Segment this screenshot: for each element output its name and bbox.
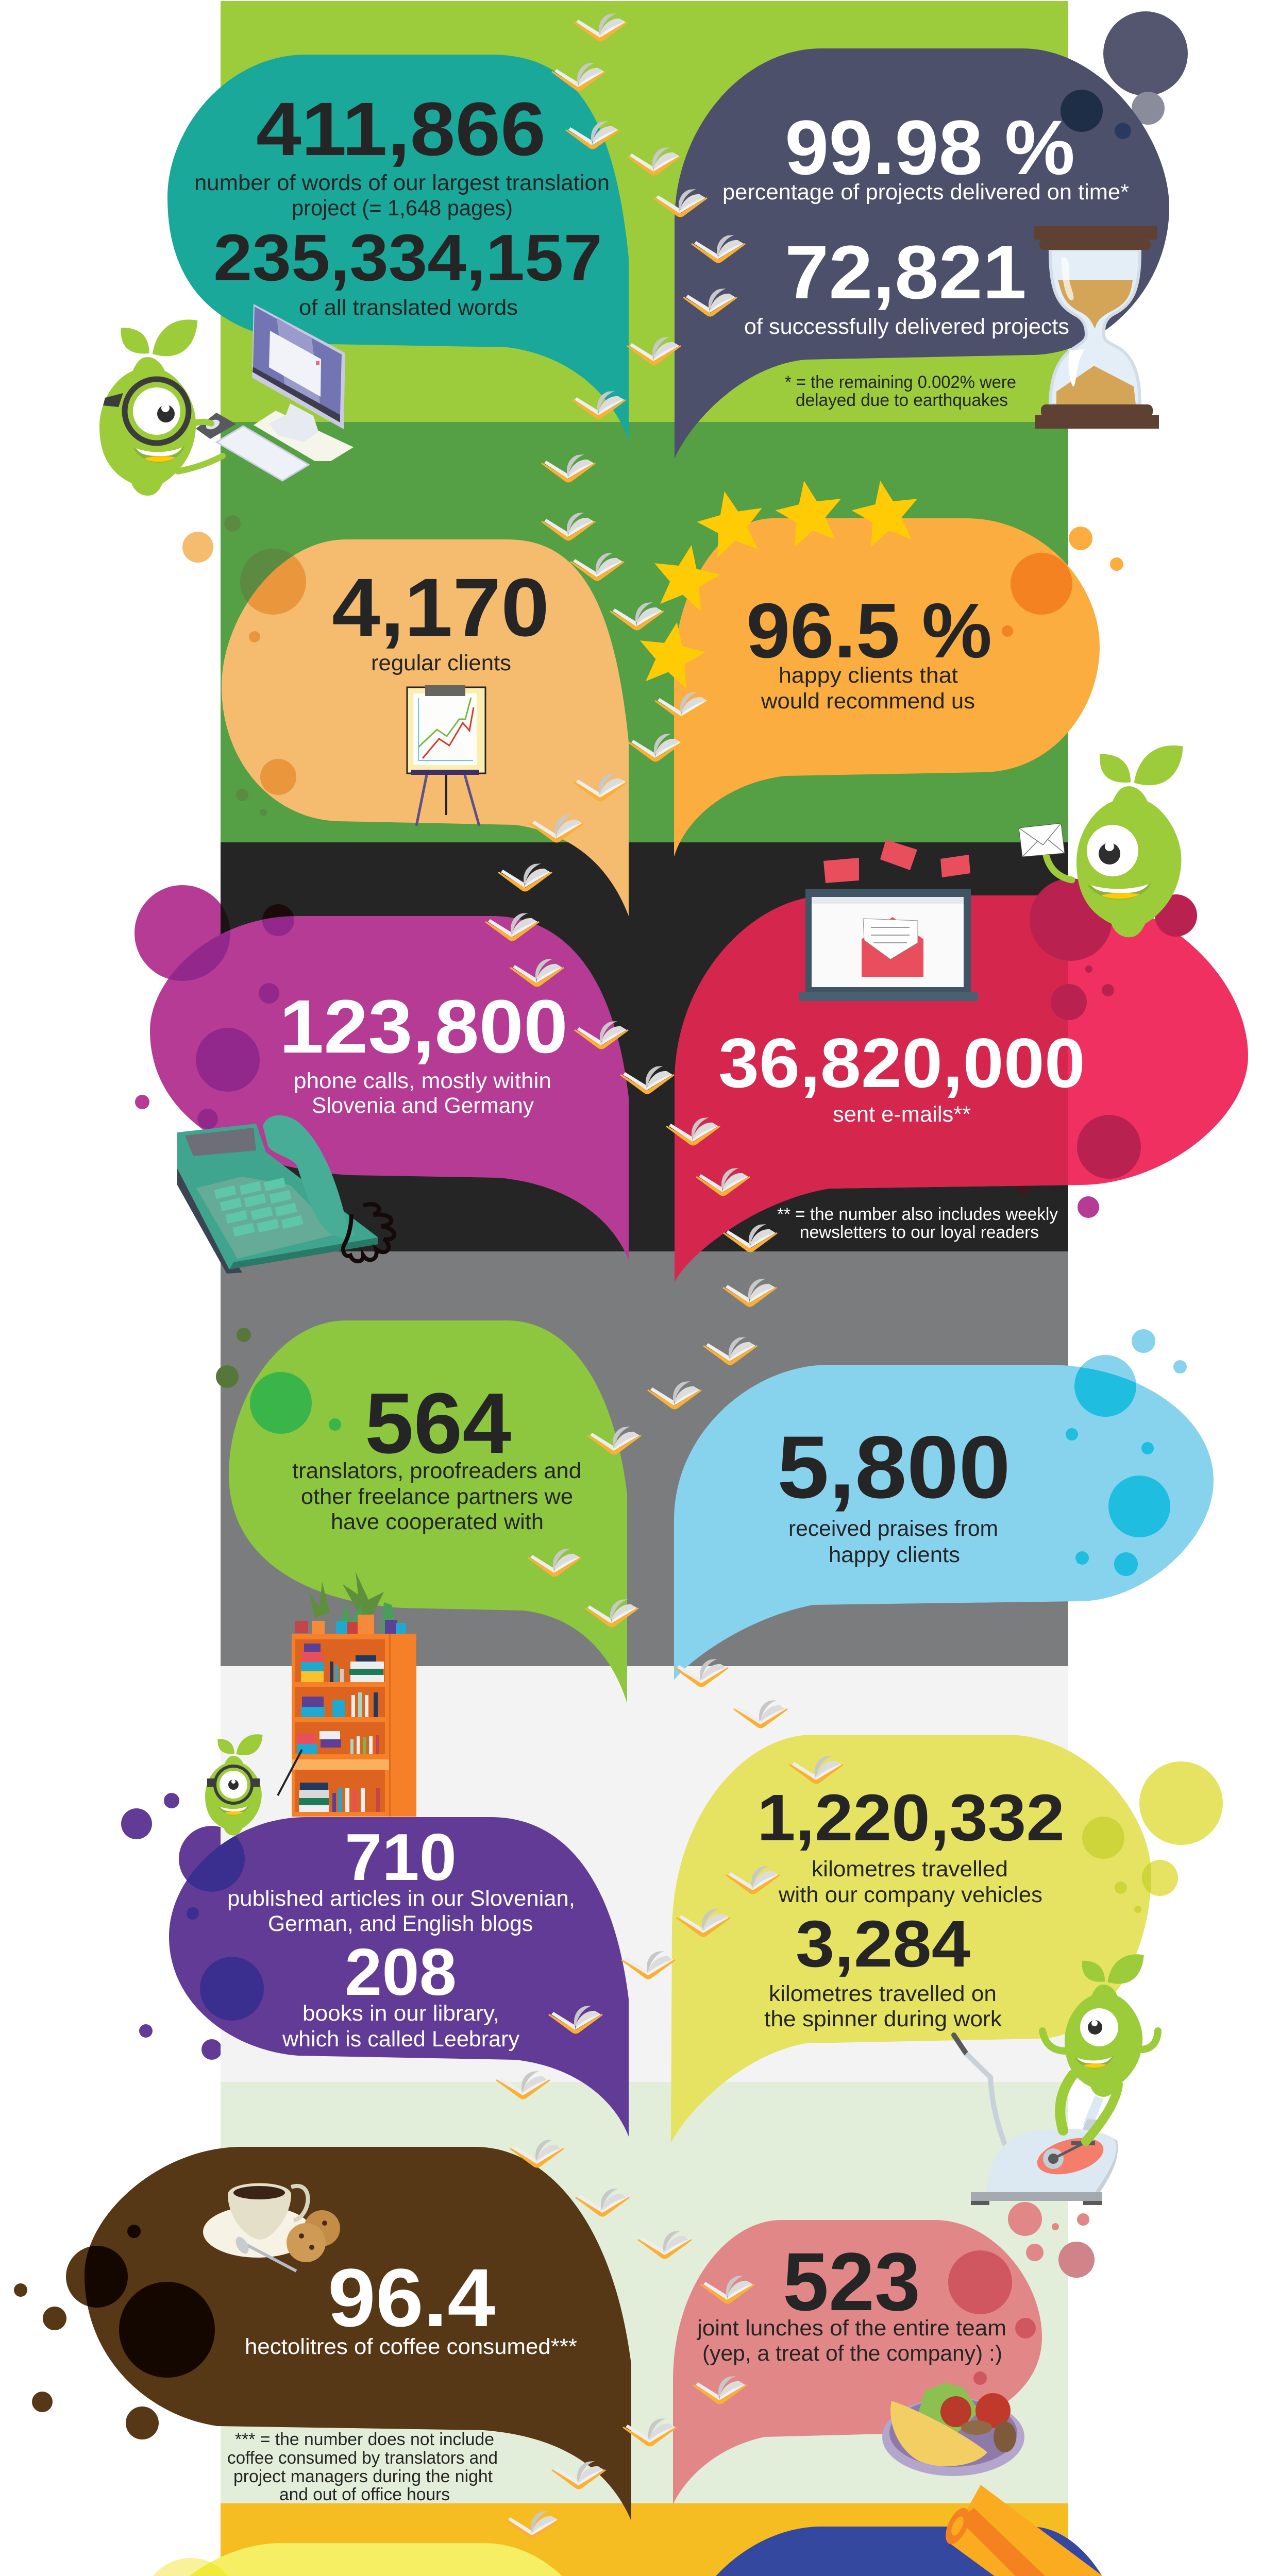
label: hectolitres of coffee: hectolitres of coffee consumed*** [245, 2334, 577, 2359]
panel: joint lunches [673, 2220, 1042, 2504]
illustration: mouse pad [196, 413, 236, 439]
panel: sent e-mails [670, 745, 1248, 1288]
label: praises from clients: received praises from [788, 1516, 998, 1541]
panel: kilometres travelled [671, 1735, 1178, 2205]
label: phone calls: Slovenia and Germany [312, 1093, 534, 1118]
illustration: teal telephone [177, 1115, 394, 1274]
label: books in library: books in our library, [302, 2001, 499, 2026]
mascot: lemon on spinner [1042, 1954, 1158, 2141]
illustration: laptop with e-mail [799, 889, 978, 1001]
illustration: hourglass [1034, 226, 1159, 429]
panel: jogging and table football [673, 2485, 1166, 2576]
label: published articles [227, 1886, 575, 1936]
label: freelance partners [292, 1459, 581, 1534]
panel: received praises [674, 1355, 1214, 1680]
icons: trail of flying open books [454, 13, 844, 2576]
footnote: coffee exclusions [227, 2430, 498, 2504]
label: would recommend us: would recommend us [761, 689, 975, 714]
decorative circles [85, 2225, 215, 2378]
stat: 123,800: 123,800 [279, 985, 568, 1069]
decorative circles [168, 916, 294, 1129]
label: words in largest project [194, 171, 610, 221]
label: freelance partners: have cooperated with [331, 1510, 544, 1534]
illustration: flying envelopes [823, 840, 970, 883]
mascot: lemon with pointer [205, 1734, 302, 1836]
stat: 72,821: 72,821 [785, 230, 1027, 315]
decorative circles [1030, 878, 1197, 1179]
panel: phone calls [150, 916, 629, 1274]
panel: clients who would recommend [633, 475, 1100, 857]
panel: punch bag [78, 2543, 627, 2576]
panel: coffee consumed [66, 2147, 631, 2521]
illustration: coffee cup and cookies [203, 2183, 340, 2271]
label: phone calls: phone calls, mostly within [294, 1069, 551, 1093]
label: joint lunches: joint lunches of the entire team [696, 2316, 1006, 2341]
label: percentage delivered on time: percentage of projects delivered on time* [722, 180, 1129, 205]
label: delivered projects: of successfully delivered projects [744, 314, 1069, 339]
label: company vehicles: with our company vehicles [778, 1883, 1042, 1907]
stat: 96.5 %: 96.5 % [746, 587, 992, 674]
background colour bands [221, 1, 1068, 2576]
label: company vehicles: kilometres travelled [812, 1857, 1008, 1882]
footnote: earthquakes: * = the remaining 0.002% were [785, 372, 1016, 392]
decorative circles [122, 2558, 239, 2576]
stat: 564: 564 [365, 1376, 511, 1471]
footnote: coffee exclusions: and out of office hours [279, 2485, 450, 2504]
label: phone calls [294, 1069, 551, 1118]
decorative circles [948, 2250, 1036, 2385]
footnote: coffee exclusions: coffee consumed by translators and [227, 2448, 498, 2468]
stat: 4,170: 4,170 [332, 561, 549, 653]
label: spinner kilometres [764, 1981, 1002, 2031]
label: all translated words: of all translated words [299, 295, 518, 320]
label: words in largest project: number of words of our largest translation [194, 171, 610, 195]
footnote: newsletters: newsletters to our loyal readers [800, 1223, 1039, 1242]
illustration: bookshelf with plants [292, 1572, 416, 1817]
stat: 36,820,000: 36,820,000 [718, 1024, 1085, 1102]
stat: 3,284: 3,284 [796, 1907, 970, 1981]
panel: translators and partners [229, 1320, 627, 1703]
panel: largest project and translated words [167, 55, 629, 440]
label: spinner kilometres: the spinner during work [764, 2007, 1002, 2031]
decorative circles [1082, 1817, 1151, 1913]
stat: 1,220,332: 1,220,332 [757, 1781, 1065, 1855]
panel: articles and library [169, 1734, 629, 2137]
label: regular clients: regular clients [371, 651, 511, 675]
footnote: newsletters: ** = the number also includes weekly [777, 1205, 1058, 1224]
panel: projects delivered on time [675, 48, 1169, 459]
label: published articles: published articles in our Slovenian, [227, 1886, 575, 1911]
decorative circles on the bands [134, 515, 1095, 2278]
footnote: newsletters [777, 1205, 1058, 1242]
stat: 96.4: 96.4 [328, 2251, 495, 2344]
label: published articles: German, and English blogs [268, 1911, 533, 1936]
label: would recommend us [761, 663, 975, 714]
label: sent e-mails: sent e-mails** [833, 1102, 971, 1127]
footnote: coffee exclusions: *** = the number does not include [235, 2430, 494, 2449]
label: joint lunches [696, 2316, 1006, 2366]
footnote: earthquakes [785, 372, 1016, 410]
label: freelance partners: translators, proofreaders and [292, 1459, 581, 1483]
stat: 5,800: 5,800 [777, 1418, 1011, 1517]
footnote: coffee exclusions: project managers during the night [233, 2467, 493, 2486]
decorative circles [187, 1836, 264, 2021]
stat: 208: 208 [345, 1935, 457, 2009]
illustration: rolled yoga mat [941, 2485, 1111, 2576]
decorative dark circles [1061, 90, 1131, 139]
label: would recommend us: happy clients that [779, 663, 958, 688]
decorative circles [1066, 1355, 1170, 1576]
decorative circles [1002, 553, 1072, 637]
illustration: exercise bike [954, 2035, 1118, 2205]
footnote: earthquakes: delayed due to earthquakes [796, 391, 1008, 410]
label: freelance partners: other freelance partners we [301, 1484, 573, 1509]
label: spinner kilometres: kilometres travelled on [769, 1981, 997, 2006]
illustration: computer with keyboard [216, 304, 354, 481]
icon: five rating stars [633, 475, 924, 690]
stat: 99.98 %: 99.98 % [785, 104, 1075, 191]
mascot: lemon with glasses at computer [99, 319, 223, 496]
label: company vehicles [778, 1857, 1042, 1907]
decorative circles [250, 1372, 341, 1434]
mascot: lemon holding envelope [1019, 745, 1183, 937]
label: books in library [282, 2001, 520, 2052]
decorative circles [247, 555, 306, 795]
stat: 411,866: 411,866 [256, 87, 546, 172]
label: praises from clients [788, 1516, 998, 1567]
label: praises from clients: happy clients [829, 1543, 960, 1567]
label: books in library: which is called Leebrary [282, 2027, 520, 2052]
illustration: omelette plate [882, 2383, 1024, 2476]
panel: regular clients [222, 539, 629, 916]
illustration: flip chart [407, 685, 485, 826]
stat: 235,334,157: 235,334,157 [213, 221, 602, 295]
label: joint lunches: (yep, a treat of the company) :) [702, 2341, 1002, 2366]
label: words in largest project: project (= 1,648 pages) [292, 196, 513, 221]
stat: 710: 710 [345, 1820, 457, 1894]
stat: 523: 523 [783, 2235, 920, 2328]
